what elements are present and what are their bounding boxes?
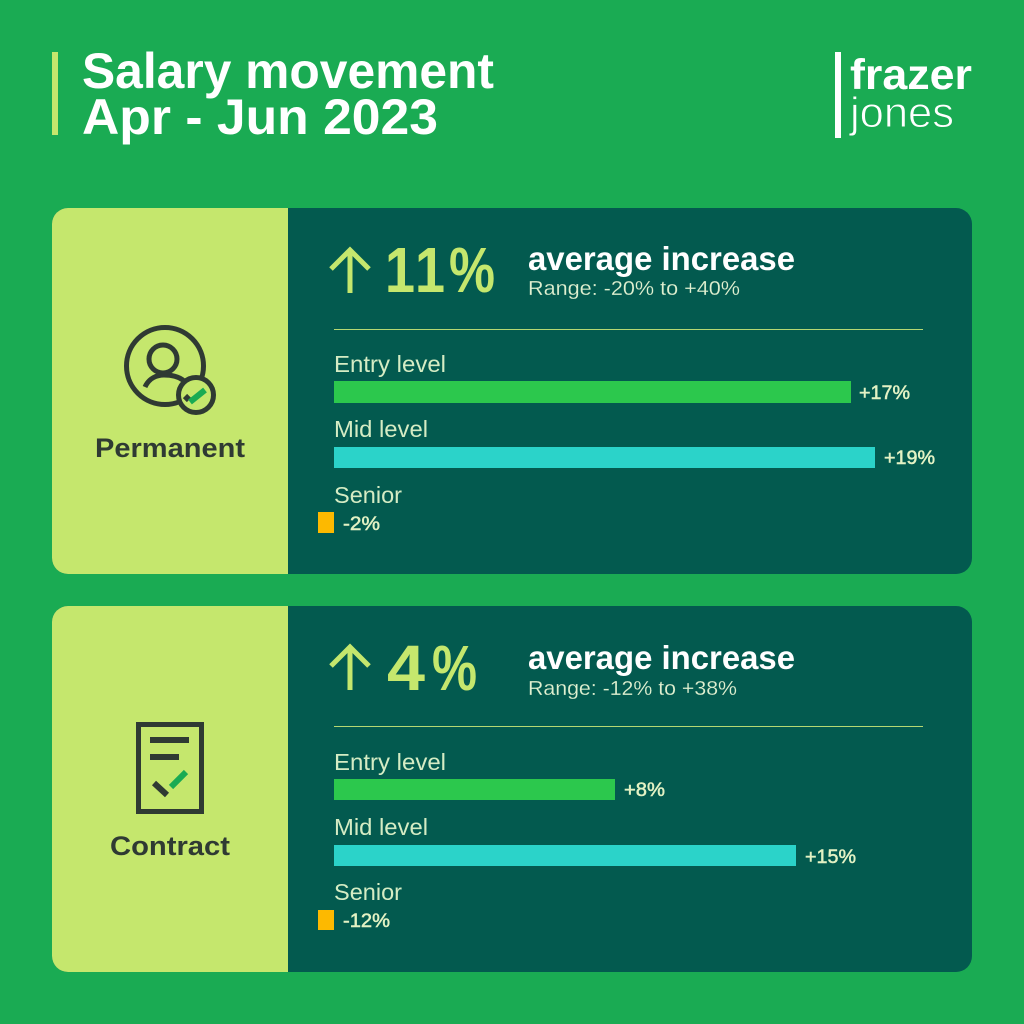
stat heading: average increase: average increase xyxy=(528,240,795,277)
bar: entry level: Entry level xyxy=(334,749,446,775)
stat: 11%: 1 xyxy=(415,234,445,306)
bar: mid level: Mid level xyxy=(334,416,428,442)
icon: person with check badge xyxy=(126,328,214,412)
stat: 11%: 1 xyxy=(385,234,415,306)
bar: mid level xyxy=(334,416,935,469)
bar: senior xyxy=(318,482,402,535)
stat range: Range: -20% to +40% xyxy=(528,278,740,300)
bar: senior: -12% xyxy=(343,911,390,932)
bar: entry level xyxy=(334,749,665,801)
bar: entry level: +8% xyxy=(624,780,665,801)
stat range: Range: -12% to +38% xyxy=(528,678,737,700)
bar: mid level: +19% xyxy=(884,448,935,469)
bar: mid level: Mid level xyxy=(334,814,428,840)
bar: senior: -2% xyxy=(343,514,380,535)
title: Salary movement xyxy=(82,43,494,99)
label: permanent: Permanent xyxy=(95,433,245,463)
label: contract: Contract xyxy=(110,831,230,861)
stat: 4%: % xyxy=(432,632,477,704)
panel: contract xyxy=(52,606,972,972)
bar: senior xyxy=(318,879,402,932)
bar: mid level: +15% xyxy=(805,847,856,868)
stat: 4%: 4 xyxy=(387,632,425,704)
bar: entry level xyxy=(334,351,910,404)
logo: frazer jones: frazer xyxy=(850,51,972,99)
logo: frazer jones xyxy=(835,51,972,138)
bar: mid level xyxy=(334,814,856,868)
bar: entry level: Entry level xyxy=(334,351,446,377)
bar: senior: Senior xyxy=(334,879,402,905)
bar: entry level: +17% xyxy=(859,383,910,404)
icon: up arrow xyxy=(331,250,369,293)
logo: frazer jones: jones xyxy=(848,89,954,137)
icon: up arrow xyxy=(331,647,369,690)
stat: 11%: % xyxy=(449,234,495,306)
stat heading: average increase: average increase xyxy=(528,639,795,676)
title xyxy=(52,43,494,145)
title: Apr - Jun 2023 xyxy=(82,89,438,145)
icon: contract document with check xyxy=(138,724,202,812)
bar: senior: Senior xyxy=(334,482,402,508)
panel: permanent xyxy=(52,208,972,574)
